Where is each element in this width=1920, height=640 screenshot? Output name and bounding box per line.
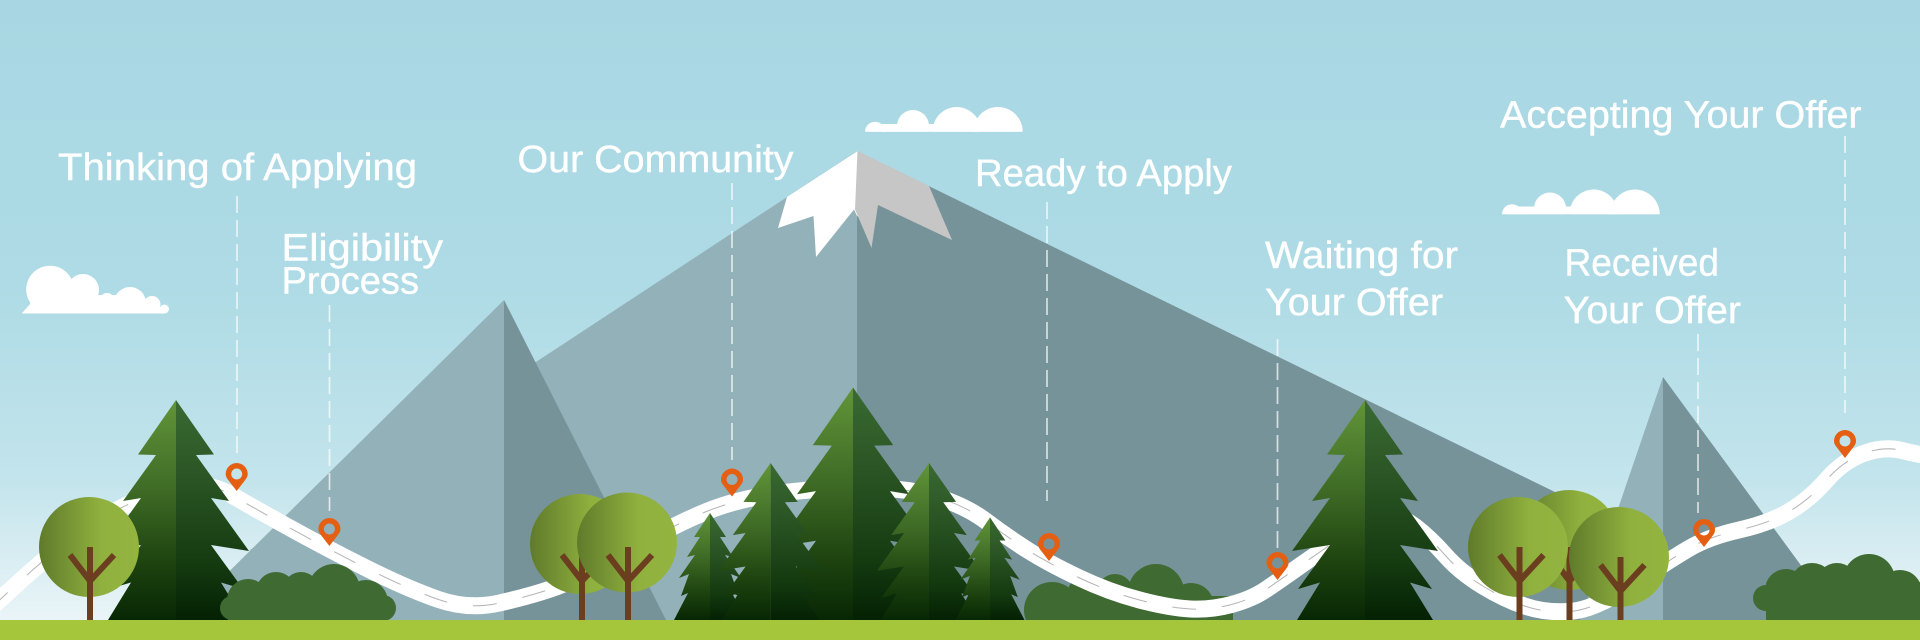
pine cluster centre [674,388,1025,620]
left mountain [180,300,666,620]
label: Waiting for Your Offer: Waiting for [1265,235,1458,277]
dashed connector lines [237,136,1845,554]
bush left [220,564,396,624]
round tree far left [39,497,139,620]
label: Ready to Apply: Ready to Apply [975,153,1232,195]
main mountain [250,151,1817,620]
right mountain [1580,377,1841,620]
bush right [1753,554,1920,620]
label: Eligibility Process: Eligibility [282,228,443,270]
round tree group left [530,492,677,620]
label: Accepting Your Offer: Accepting Your Offer [1500,94,1862,136]
label: Received Your Offer [1564,242,1741,332]
ground strip [0,620,1920,640]
cloud left [22,266,169,319]
label: Eligibility Process: Process [282,260,419,302]
label: Waiting for Your Offer: Your Offer [1265,282,1443,324]
cloud top centre [865,107,1023,132]
label: Thinking of Applying: Thinking of Applying [58,147,417,189]
label: Received Your Offer: Received [1564,242,1719,284]
bush centre [1024,564,1233,638]
label: Eligibility Process [282,228,443,302]
pine tree left [103,400,249,620]
pine tree right of centre [1292,400,1438,620]
winding road [0,449,1920,612]
label: Waiting for Your Offer [1265,235,1458,324]
label: Received Your Offer: Your Offer [1564,290,1741,332]
cloud right [1502,190,1660,214]
round tree group right [1468,490,1669,630]
snow cap [778,151,952,257]
location pins [226,430,1856,580]
label: Our Community: Our Community [518,139,794,181]
